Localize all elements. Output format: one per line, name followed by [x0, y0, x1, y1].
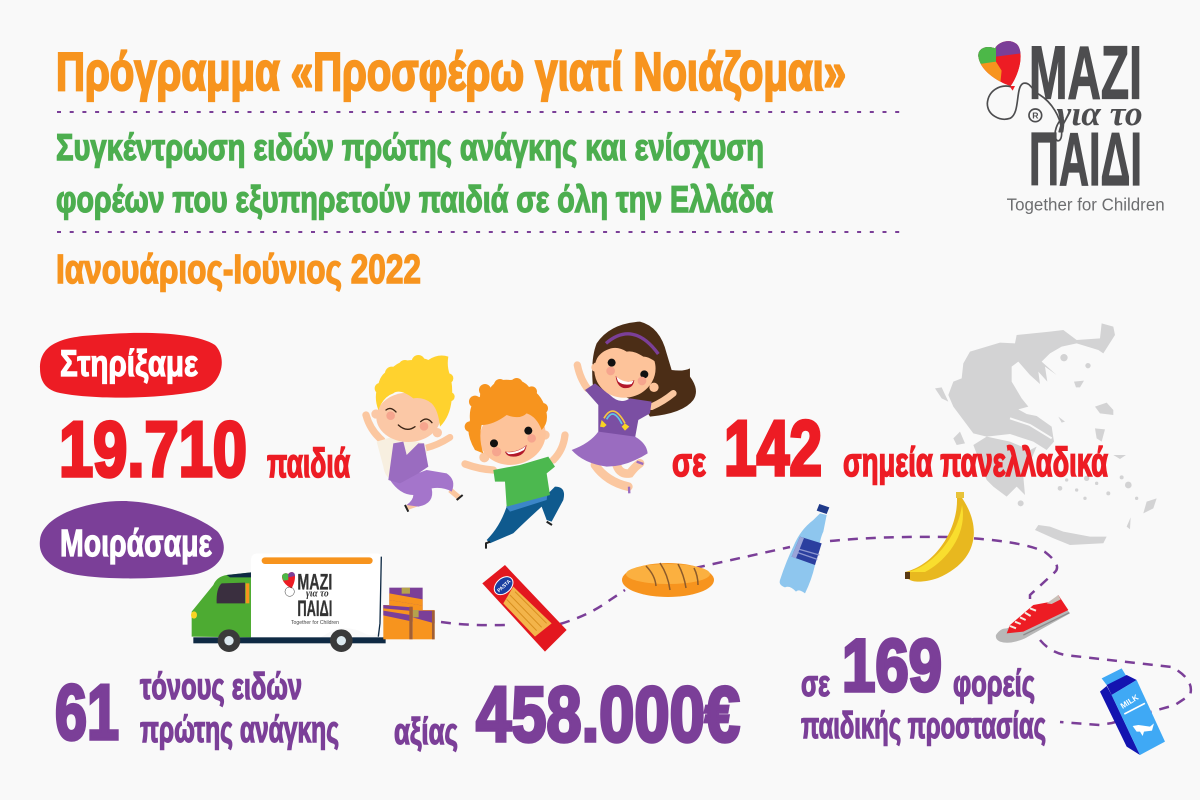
truck logo: ΜΑΖΙ	[297, 569, 332, 594]
panel: supported	[40, 333, 1108, 493]
logo: για το	[1057, 95, 1143, 133]
badge: supported: Στηρίξαμε	[60, 343, 198, 384]
child: girl with dark hair	[572, 322, 696, 493]
icon: water bottle	[780, 504, 829, 593]
icon: red sneaker	[996, 595, 1070, 643]
stat: organisations: φορείς	[953, 663, 1035, 704]
map of Greece	[935, 323, 1157, 545]
badge: supported	[40, 333, 222, 398]
date: Ιανουάριος-Ιούνιος 2022	[56, 246, 421, 292]
badge: distributed: Μοιράσαμε	[60, 523, 212, 565]
stat: children: παιδιά	[267, 440, 350, 486]
stat: value	[394, 670, 740, 758]
panel: header	[56, 42, 905, 292]
stat: tonnes: τόνους ειδών	[140, 666, 302, 707]
icon: milk carton: MILK	[1119, 693, 1140, 711]
subtitle: Συγκέντρωση ειδών πρώτης ανάγκης και ενίσχυση	[56, 127, 764, 168]
stat: tonnes: 61	[55, 668, 119, 756]
truck logo	[282, 569, 339, 626]
icon: banana	[905, 492, 974, 582]
stat: locations: 142	[724, 404, 822, 492]
stat: organisations: παιδικής προστασίας	[801, 705, 1046, 746]
illustration: delivery truck with boxes	[191, 553, 567, 652]
panel: distribution stats	[55, 624, 1046, 758]
cardboard boxes	[383, 588, 435, 639]
icon: pasta package	[482, 565, 567, 652]
stat: value: 458.000€	[476, 670, 740, 758]
stat: tonnes	[55, 666, 339, 756]
logo	[973, 30, 1165, 215]
icon: pasta package: PASTA	[496, 579, 513, 594]
stat: value: αξίας	[394, 711, 458, 752]
stat: tonnes: πρώτης ανάγκης	[140, 709, 339, 750]
truck logo: για το	[306, 589, 329, 600]
logo: Together for Children	[1007, 195, 1165, 215]
icon: milk carton	[1100, 668, 1165, 755]
stat: organisations: 169	[842, 624, 942, 707]
stat: organisations	[801, 624, 1046, 746]
dashed route	[441, 537, 1191, 725]
badge: distributed	[40, 501, 224, 578]
title: Πρόγραμμα «Προσφέρω γιατί Νοιάζομαι»	[56, 42, 846, 102]
truck logo: ΠΑΙΔΙ	[297, 596, 332, 621]
icon: bread	[622, 563, 714, 597]
truck logo: Together for Children	[291, 620, 339, 626]
child: orange-haired boy	[465, 378, 565, 549]
subtitle: φορέων που εξυπηρετούν παιδιά σε όλη την Ελλάδα	[56, 179, 773, 220]
stat: organisations: σε	[801, 663, 830, 704]
illustration: three jumping children	[366, 322, 696, 549]
stat: locations: σε	[672, 439, 706, 485]
stat: children: 19.710	[59, 405, 247, 493]
stat: locations	[672, 404, 1108, 492]
logo: R	[1032, 110, 1039, 120]
child: blond boy	[366, 355, 463, 512]
subtitle	[56, 127, 773, 220]
